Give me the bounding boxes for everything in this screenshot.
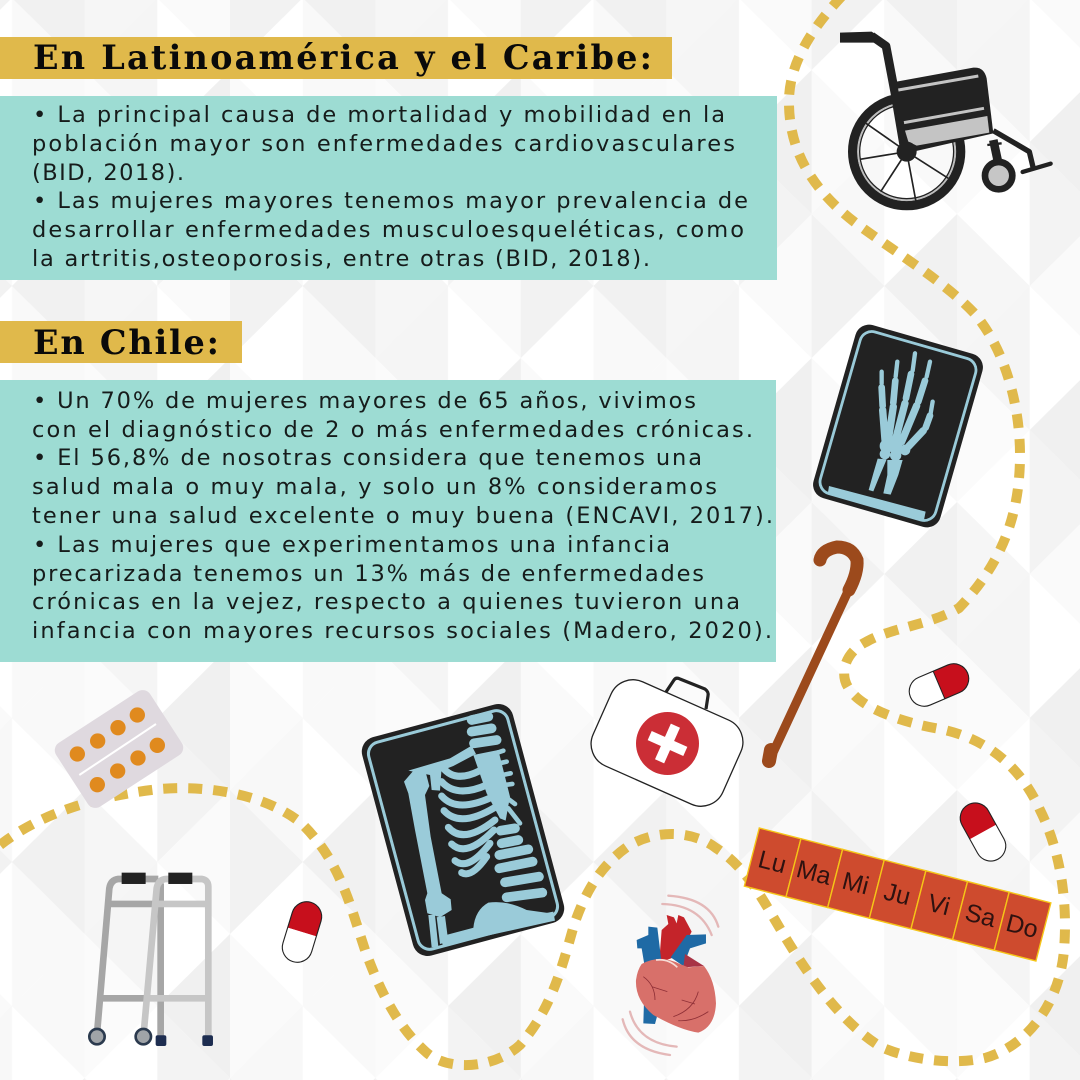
panel: Latinoamérica text block: población mayor son enfermedades cardiovasculares — [32, 131, 735, 157]
panel: Latinoamérica text block — [0, 96, 777, 280]
panel: Chile text block: • Un 70% de mujeres mayores de 65 años, vivimos — [33, 388, 696, 414]
panel: Latinoamérica text block: • La principal causa de mortalidad y mobilidad en la — [33, 102, 725, 128]
icon: weekly pill calendar: Ma — [794, 855, 834, 891]
icon: weekly pill calendar: Lu — [755, 845, 789, 879]
panel: Chile text block: salud mala o muy mala, y solo un 8% consideramos — [32, 474, 717, 500]
icon: weekly pill calendar: Do — [1003, 909, 1041, 944]
heading: En Latinoamérica y el Caribe: En Latinoamérica y el Caribe: — [33, 38, 652, 77]
icon: first aid kit — [583, 672, 751, 814]
icon: weekly pill calendar: Vi — [925, 889, 953, 921]
icon: pill right — [955, 798, 1011, 866]
panel: Chile text block — [0, 380, 776, 662]
icon: walker — [89, 873, 213, 1046]
icon: hand x-ray — [810, 321, 986, 531]
panel: Chile text block: • Las mujeres que experimentamos una infancia — [33, 532, 670, 558]
panel: Latinoamérica text block: • Las mujeres mayores tenemos mayor prevalencia de — [33, 188, 748, 214]
icon: chest x-ray — [358, 701, 568, 959]
icon: weekly pill calendar: Mi — [839, 867, 872, 901]
panel: Chile text block: crónicas en la vejez, respecto a quienes tuvieron una — [32, 589, 740, 615]
panel: Chile text block: infancia con mayores recursos sociales (Madero, 2020). — [32, 618, 772, 644]
panel: Latinoamérica text block: (BID, 2018). — [32, 160, 184, 186]
icon: weekly pill calendar — [744, 828, 1051, 961]
icon: wheelchair — [840, 32, 1051, 206]
icon: weekly pill calendar: Ju — [881, 878, 913, 911]
icon: walking cane — [769, 547, 857, 761]
icon: blister pill pack — [51, 687, 187, 811]
panel: Chile text block: • El 56,8% de nosotras considera que tenemos una — [33, 445, 702, 471]
icon: pill left — [279, 898, 325, 966]
heading: En Chile: En Chile: — [33, 323, 219, 362]
icon: anatomical heart — [623, 896, 718, 1055]
icon: pill top right — [905, 659, 973, 711]
panel: Latinoamérica text block: la artritis,osteoporosis, entre otras (BID, 2018). — [32, 246, 650, 272]
panel: Chile text block: con el diagnóstico de 2 o más enfermedades crónicas. — [32, 417, 753, 443]
panel: Latinoamérica text block: desarrollar enfermedades musculoesqueléticas, como — [32, 217, 744, 243]
panel: Chile text block: tener una salud excelente o muy buena (ENCAVI, 2017). — [32, 503, 773, 529]
icon: weekly pill calendar: Sa — [962, 898, 999, 933]
panel: Chile text block: precarizada tenemos un 13% más de enfermedades — [32, 561, 704, 587]
